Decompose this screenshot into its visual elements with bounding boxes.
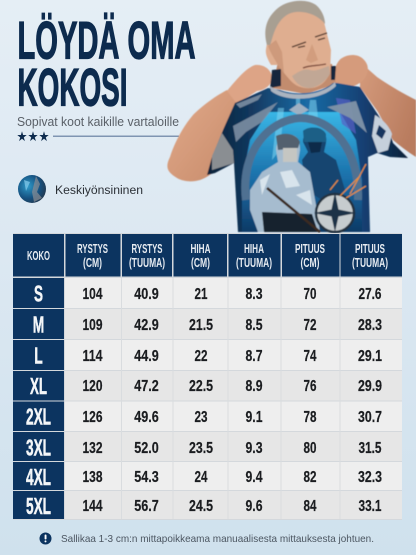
title <box>18 12 196 118</box>
row XL: XL <box>30 373 47 399</box>
sparks <box>330 164 366 198</box>
right hand <box>333 55 368 87</box>
white soldier <box>250 134 320 232</box>
row L: 114 <box>82 348 103 365</box>
row 3XL: 3XL <box>26 434 51 460</box>
row 5XL: 33.1 <box>358 498 382 515</box>
rifle <box>267 188 320 232</box>
row 5XL: 144 <box>82 498 103 515</box>
row S: 21 <box>194 286 208 303</box>
size table <box>13 233 402 520</box>
icon: exclamation <box>40 532 52 544</box>
collar trim <box>270 82 336 99</box>
table header: PITUUS <box>295 241 325 256</box>
subtitle: Sopivat koot kaikille vartaloille <box>17 114 179 129</box>
row 2XL: 126 <box>82 409 103 426</box>
stubble <box>292 66 330 88</box>
table header: (CM) <box>191 255 210 270</box>
table header: (CM) <box>83 255 102 270</box>
row S: 40.9 <box>134 286 159 303</box>
right sleeve trim <box>372 115 392 153</box>
row 2XL: 49.6 <box>134 409 159 426</box>
row 4XL: 32.3 <box>358 469 382 486</box>
size cells shading <box>65 278 402 519</box>
table header: RYSTYS <box>132 241 163 256</box>
table header: (TUUMA) <box>352 255 388 270</box>
row S: S <box>34 280 43 306</box>
row L: 29.1 <box>358 348 382 365</box>
t-shirt <box>207 83 408 232</box>
subtitle rule <box>53 136 179 137</box>
row M: 8.5 <box>246 317 263 334</box>
row 3XL: 80 <box>304 440 316 457</box>
row L: 8.7 <box>246 348 262 365</box>
colour name: Keskiyönsininen <box>55 185 143 197</box>
soldier dark pants <box>262 212 318 232</box>
row 2XL: 9.1 <box>246 409 263 426</box>
table grid background <box>13 233 402 520</box>
row XL: 22.5 <box>189 378 213 395</box>
row 5XL <box>13 491 382 519</box>
row 3XL: 52.0 <box>134 440 159 457</box>
row S <box>13 278 382 308</box>
table header: HIHA <box>244 241 264 256</box>
row M <box>13 309 382 339</box>
title: LÖYDÄ OMA <box>18 12 196 70</box>
row 4XL: 24 <box>194 469 208 486</box>
star rating: ★★★ <box>16 129 50 144</box>
row M: 42.9 <box>134 317 159 334</box>
man wearing t-shirt <box>167 1 416 232</box>
row L: 22 <box>194 348 208 365</box>
row S: 27.6 <box>358 286 382 303</box>
nose shading <box>306 44 318 63</box>
row M: 109 <box>82 317 103 334</box>
table header: (CM) <box>300 255 320 270</box>
row M: M <box>33 312 44 338</box>
row 2XL: 78 <box>304 409 317 426</box>
row 3XL: 132 <box>82 440 102 457</box>
row 3XL: 9.3 <box>246 440 263 457</box>
compass <box>314 192 356 232</box>
table header: KOKO <box>27 248 50 263</box>
left hand <box>227 65 272 104</box>
table header: (TUUMA) <box>129 255 165 270</box>
hair <box>265 1 325 45</box>
table header: (TUUMA) <box>236 255 272 270</box>
row 3XL <box>13 432 382 461</box>
row 4XL: 54.3 <box>134 469 159 486</box>
left knotwork <box>233 94 278 142</box>
table header: PITUUS <box>355 241 385 256</box>
row XL: 120 <box>82 378 102 395</box>
row L: 74 <box>304 348 317 365</box>
purple aurora <box>336 98 356 134</box>
aurora panel <box>242 112 362 232</box>
row 4XL: 9.4 <box>246 469 263 486</box>
right arm <box>360 62 416 157</box>
row XL: 8.9 <box>246 378 263 395</box>
row 2XL <box>13 402 382 431</box>
row 5XL: 9.6 <box>246 498 263 515</box>
row 2XL: 30.7 <box>358 409 382 426</box>
row XL: 47.2 <box>134 378 159 395</box>
central knot <box>289 103 309 115</box>
row 2XL: 2XL <box>26 404 51 430</box>
row S: 70 <box>304 286 316 303</box>
row 5XL: 5XL <box>26 493 51 519</box>
row 4XL: 138 <box>82 469 103 486</box>
head <box>266 2 331 88</box>
row 3XL: 23.5 <box>189 440 213 457</box>
tolerance note: Sallikaa 1-3 cm:n mittapoikkeama manuaalisesta mittauksesta johtuen. <box>61 533 374 545</box>
row L: L <box>34 342 43 368</box>
row L: 44.9 <box>134 348 159 365</box>
right knotwork <box>327 101 367 133</box>
row 4XL: 82 <box>304 469 316 486</box>
table header: HIHA <box>190 241 211 256</box>
row L <box>13 340 382 370</box>
row 2XL: 23 <box>194 409 208 426</box>
left sleeve trim <box>212 133 234 170</box>
neck <box>272 62 336 94</box>
row M: 28.3 <box>358 317 382 334</box>
colour swatch <box>18 175 46 203</box>
arch ring <box>245 118 358 200</box>
blue soldier <box>302 128 345 205</box>
left arm <box>167 90 240 181</box>
row XL: 76 <box>304 378 317 395</box>
table header: RYSTYS <box>77 241 108 256</box>
row 3XL: 31.5 <box>358 440 382 457</box>
row 5XL: 84 <box>304 498 317 515</box>
row XL <box>13 371 382 400</box>
row XL: 29.9 <box>358 378 382 395</box>
shaded face side <box>268 40 284 74</box>
row 4XL: 4XL <box>26 464 51 490</box>
row S: 104 <box>82 286 103 303</box>
collar back <box>270 69 281 88</box>
row S: 8.3 <box>246 286 263 303</box>
title: KOKOSI <box>18 58 128 118</box>
table header <box>13 234 402 276</box>
row M: 72 <box>304 317 316 334</box>
column separators <box>121 278 340 519</box>
brows, eyes, nose, mouth <box>292 33 327 68</box>
row 5XL: 24.5 <box>189 498 213 515</box>
row M: 21.5 <box>189 317 213 334</box>
aurora streaks <box>272 96 318 160</box>
row 4XL <box>13 462 382 490</box>
row 5XL: 56.7 <box>134 498 159 515</box>
